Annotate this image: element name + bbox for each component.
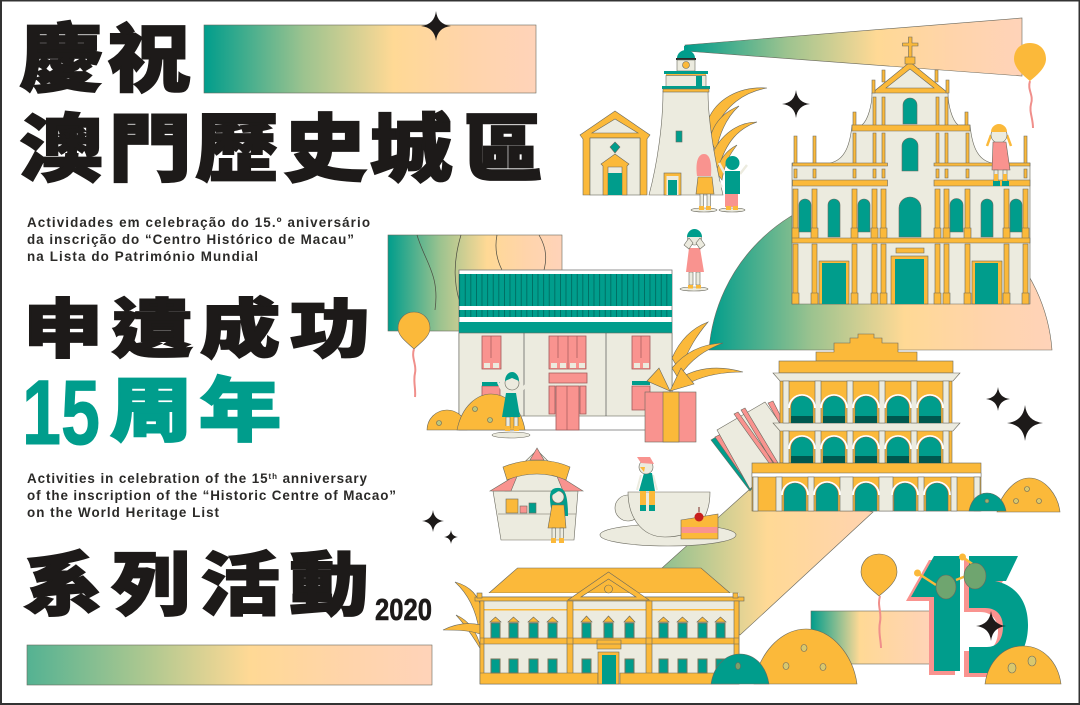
text: English subtitle: anniversary [278, 471, 368, 486]
balloon: bottom [861, 554, 897, 648]
text: English subtitle: of the inscription of the “Historic Centre of Macao” [27, 488, 396, 503]
gift box [645, 368, 696, 442]
icon: star on top bar [421, 11, 451, 41]
lower building windows [491, 623, 725, 673]
title: 15周年: 15 [22, 362, 100, 464]
palace cornices [773, 373, 960, 431]
15 teal [911, 556, 1028, 673]
gold columns and cornices [792, 70, 1030, 304]
character: boy on cup [637, 457, 657, 511]
lighthouse [649, 46, 723, 195]
character: child at stall [543, 488, 572, 543]
palace arches [784, 396, 948, 511]
palace columns [753, 381, 980, 511]
cake slice [681, 507, 718, 539]
church facade [792, 37, 1030, 304]
gradient bar: top [204, 25, 536, 93]
text: Portuguese subtitle: da inscrição do “Centro Histórico de Macau” [27, 232, 354, 247]
title: 澳門歷史城區: 澳 [20, 108, 102, 191]
palace dark window bands [791, 416, 941, 463]
icon: leaves behind lighthouse [708, 88, 767, 180]
icon: glasses on 15 [914, 554, 986, 599]
character: girl with yellow skirt [691, 154, 722, 212]
title: 15周年: 周 [110, 373, 192, 451]
text: English subtitle [27, 471, 396, 520]
title: 15周年: 年 [199, 373, 281, 451]
title: 申遺成功: 成 [200, 295, 280, 366]
government palace building [752, 334, 981, 511]
bushes at house [427, 394, 525, 430]
lighthouse beam [685, 18, 1022, 76]
house building [459, 270, 672, 430]
text: English subtitle: th [269, 472, 277, 481]
market stall [490, 448, 583, 540]
title: 慶祝: 慶 [20, 18, 102, 101]
title: 慶祝 [20, 18, 190, 101]
title: 澳門歷史城區: 門 [109, 108, 191, 191]
title: 系列活動: 系 [23, 547, 103, 624]
icon: stars left [422, 510, 458, 544]
gradient bar: bottom [27, 645, 432, 685]
title: 系列活動: 活 [200, 547, 280, 624]
text: Portuguese subtitle: Actividades em celebração do 15.º aniversário [27, 215, 370, 230]
title: 澳門歷史城區: 區 [463, 109, 543, 191]
bushes right of palace [969, 478, 1060, 512]
icon: star near church [782, 90, 810, 118]
text: year 2020: 2020 [375, 592, 432, 627]
icon: star in 15 [976, 611, 1006, 641]
text: English subtitle: Activities in celebration of the 15 [27, 471, 268, 486]
facade silhouette [792, 63, 1030, 304]
title: 申遺成功: 遺 [112, 295, 192, 366]
bushes bottom [711, 629, 1061, 684]
palace arch trims [782, 395, 950, 495]
character: boy waving [719, 156, 747, 212]
gradient panel with wavy lines behind house [388, 235, 562, 331]
character: girl in teal dress [492, 372, 530, 438]
lower building door [598, 652, 619, 684]
teacup with saucer [600, 492, 736, 546]
title: 申遺成功 [23, 295, 370, 366]
text: Portuguese subtitle: na Lista do Património Mundial [27, 249, 258, 264]
title: 澳門歷史城區: 城 [370, 108, 452, 191]
text: Portuguese subtitle [27, 215, 370, 264]
leaves behind gift [672, 322, 743, 386]
church windows [799, 98, 1022, 237]
gradient diagonal band [662, 489, 873, 635]
title: 系列活動: 動 [289, 547, 369, 624]
title: 澳門歷史城區: 史 [284, 108, 366, 191]
title: 15周年 [22, 362, 281, 464]
title: 慶祝: 祝 [108, 18, 190, 101]
character: girl covering eyes [680, 229, 708, 291]
title: 澳門歷史城區 [20, 108, 543, 191]
title: 澳門歷史城區: 歷 [196, 108, 278, 191]
chapel [580, 111, 650, 195]
pediment [872, 62, 948, 93]
balloon: left [398, 312, 430, 397]
text: English subtitle: on the World Heritage List [27, 505, 220, 520]
character: girl standing on church [987, 124, 1011, 186]
title: 系列活動: 列 [111, 547, 191, 624]
numeral 15 [906, 556, 1028, 677]
lower building columns and bands [480, 601, 739, 684]
icon: open book [711, 401, 780, 491]
house windows [482, 336, 650, 430]
gradient panel behind 15 [811, 611, 933, 664]
title: 系列活動 [23, 547, 369, 624]
15 pink shadow [906, 560, 1023, 677]
lower building window pediments [490, 616, 726, 622]
title: 申遺成功: 申 [23, 295, 103, 366]
cross [902, 37, 918, 58]
lower building [475, 568, 744, 684]
title: 申遺成功: 功 [290, 295, 370, 366]
church doors [819, 256, 1002, 304]
balloon: top right [1014, 43, 1046, 128]
leaves behind lower building [443, 582, 482, 650]
icon: stars right [986, 387, 1043, 441]
gradient semicircle behind church [709, 191, 1052, 350]
